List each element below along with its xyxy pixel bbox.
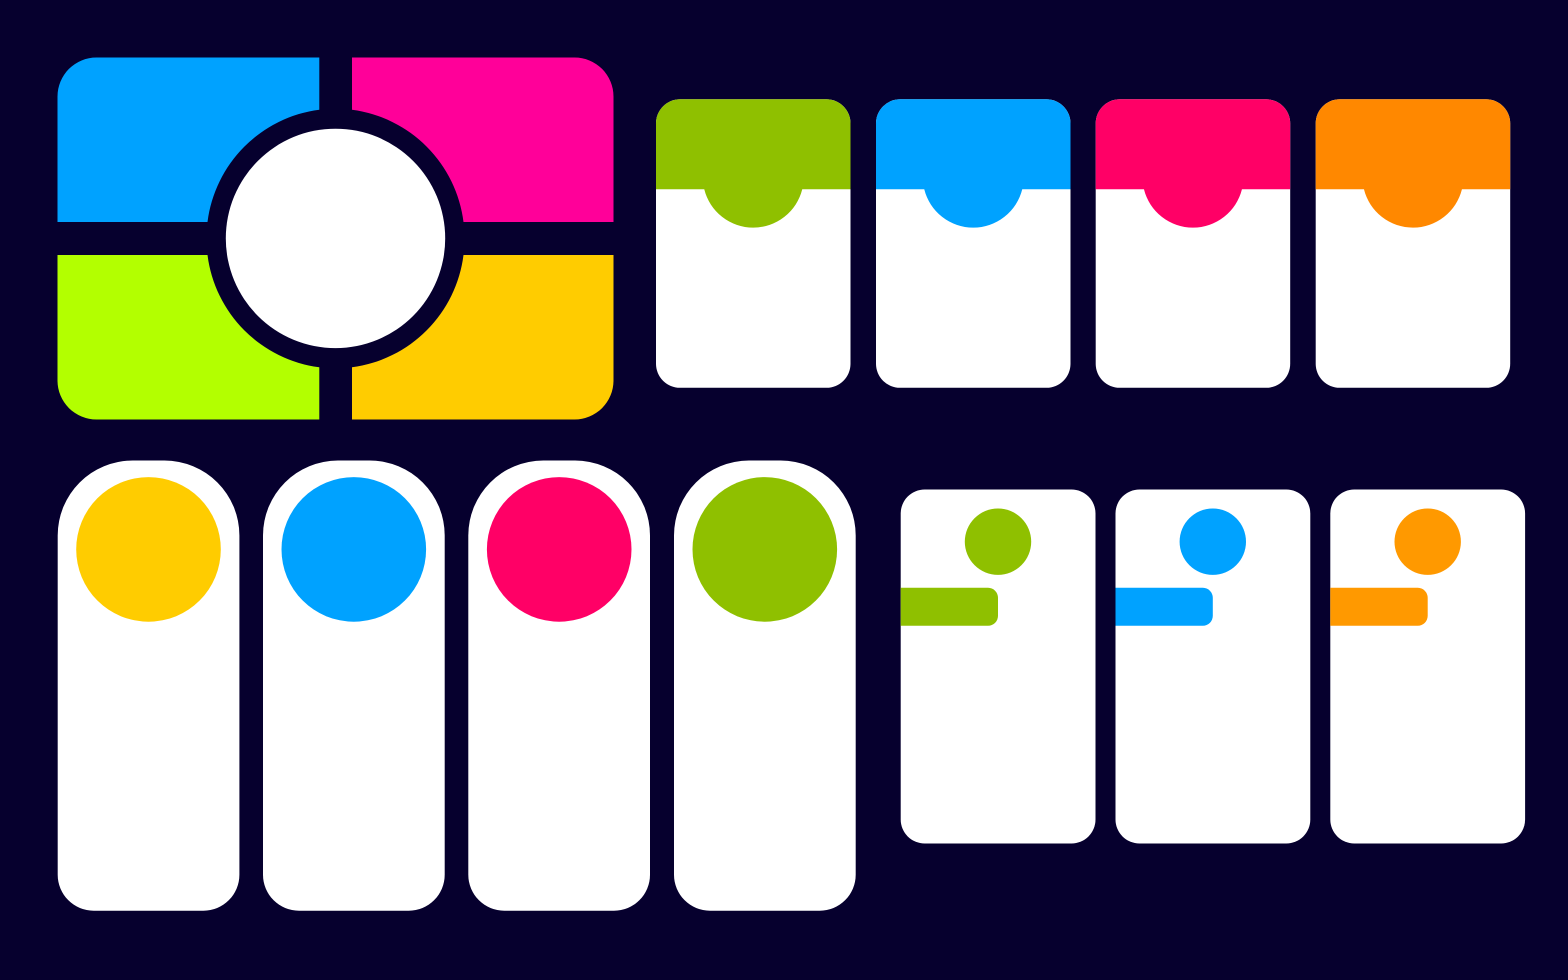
- card: crimson circle: [468, 460, 650, 911]
- card: green circle: [674, 460, 856, 911]
- card: yellow circle: [58, 460, 239, 911]
- panel: tall circle cards row: [58, 460, 856, 911]
- card: crimson header: [1096, 99, 1290, 388]
- card: green tab: [901, 490, 1096, 844]
- quadrant: magenta top right: [352, 58, 614, 222]
- card: orange tab: [1330, 490, 1525, 844]
- quadrant: yellow bottom right: [352, 255, 614, 420]
- center circle: [226, 129, 445, 348]
- quadrant: blue top left: [58, 58, 319, 222]
- card: blue header: [876, 99, 1070, 388]
- panel: tab cards row: [901, 490, 1525, 844]
- panel: header cards row: [656, 99, 1510, 388]
- card: green header: [656, 99, 850, 388]
- panel: four-quadrant diagram: [58, 58, 614, 420]
- card: blue circle: [263, 460, 445, 911]
- quadrant: lime bottom left: [58, 255, 319, 420]
- card: orange header: [1316, 99, 1510, 388]
- card: blue tab: [1116, 490, 1310, 844]
